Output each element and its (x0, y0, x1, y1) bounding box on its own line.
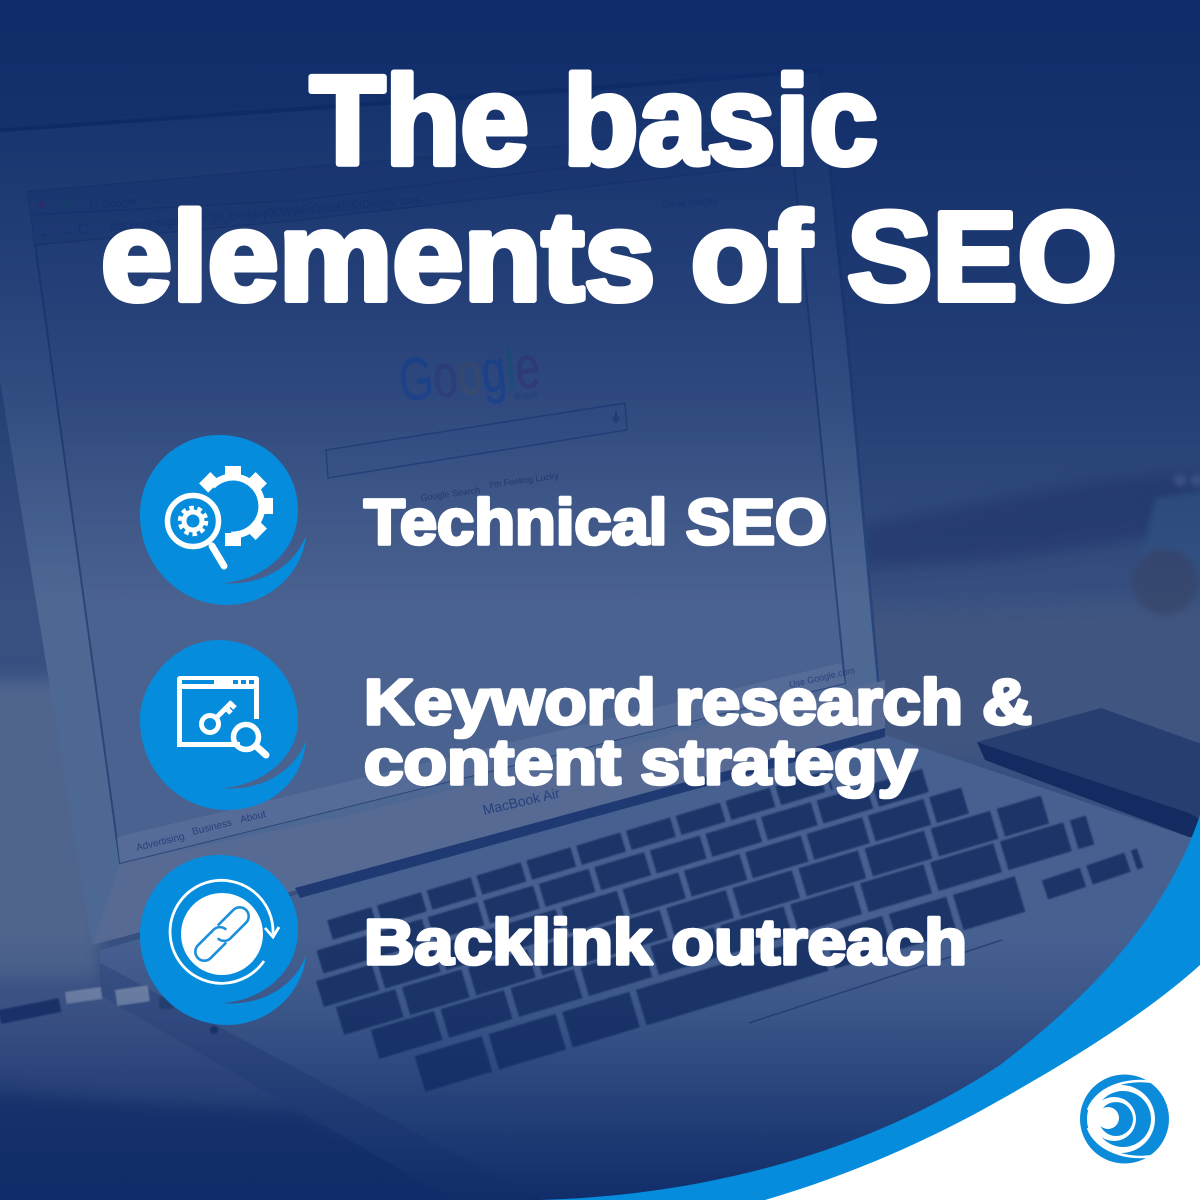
bottom-right swoosh (540, 815, 1200, 1200)
item 2 label (364, 666, 1032, 798)
google logo on screen: Brasil (514, 389, 537, 401)
item 3 label: Backlink outreach (364, 906, 967, 978)
desk band and toy (0, 470, 1200, 1200)
laptop lid (0, 68, 885, 945)
browser chrome text: ← → C (39, 221, 89, 242)
circular arrow (170, 880, 279, 983)
swoosh: white corner (765, 965, 1200, 1200)
chain link (192, 904, 252, 964)
screen footer strip (117, 663, 845, 863)
browser window (177, 676, 259, 744)
browser chrome text: Advertising (135, 831, 186, 854)
background photo: laptop on desk: I'm Feeling Lucky (489, 470, 560, 490)
google logo on screen: Google (396, 333, 543, 414)
item 2: Keyword research icon (140, 640, 306, 810)
magnifier (234, 724, 266, 755)
item 2 label: content strategy (364, 726, 917, 798)
browser chrome text: About (239, 809, 267, 826)
hinge (295, 728, 885, 898)
browser chrome text: MacBook Air (481, 785, 562, 818)
blue badge (140, 435, 306, 605)
item 1: Technical SEO icon (140, 435, 306, 605)
cable and ports (0, 985, 218, 1034)
browser chrome text: Business (191, 817, 233, 838)
background photo: laptop on desk: Google Search (420, 485, 481, 503)
item 3: Backlink outreach icon (140, 855, 306, 1025)
browser chrome text: G Google (89, 196, 137, 212)
magnifier (168, 496, 224, 566)
search box (326, 403, 627, 478)
swoosh: blue band (540, 815, 1200, 1200)
laptop screen (28, 127, 845, 863)
item 2 label: Keyword research & (364, 666, 1032, 738)
blue badge (140, 855, 306, 1025)
blue badge (140, 640, 306, 810)
browser chrome text (38, 192, 856, 854)
title (101, 50, 1117, 327)
browser chrome text: Gmail Images (661, 195, 718, 210)
keyboard keys (320, 779, 1140, 1074)
title: elements of SEO (101, 186, 1117, 327)
white disc (181, 893, 263, 975)
item 1 label: Technical SEO (364, 486, 827, 558)
title: The basic (310, 50, 878, 191)
large gear (199, 466, 273, 546)
phone on desk (977, 708, 1200, 837)
key (202, 702, 235, 732)
trackpad edge (749, 940, 1002, 1023)
browser chrome text: Use Google.com (788, 665, 856, 690)
browser chrome text: https://www.google.com.br/?gfe_rd=cr&ei=pOCNVqIsEvCp8weKh2KYOw&gws_rd=ssl (109, 192, 422, 234)
laptop base (100, 735, 1200, 1200)
logo: spiral mark (1080, 1074, 1169, 1164)
